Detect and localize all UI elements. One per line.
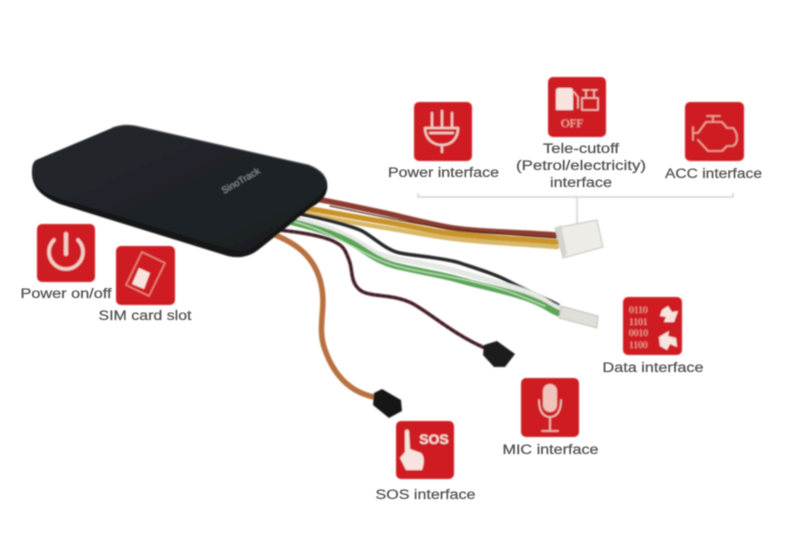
icon: power on/off: [37, 224, 95, 282]
connector: white six-pin plug: [555, 220, 603, 258]
label: data interface: Data interface: [602, 360, 704, 375]
device brand text: SinoTrack: [220, 166, 262, 197]
device: black GPS tracker: [32, 125, 327, 257]
label: power interface: Power interface: [388, 165, 499, 180]
icon: SIM card: [116, 246, 175, 305]
icon: data interface: [623, 297, 682, 355]
label: SOS interface: SOS interface: [376, 487, 476, 502]
label: MIC interface: MIC interface: [502, 442, 598, 457]
label: ACC interface: ACC interface: [665, 166, 762, 181]
icon: tele-cutoff: [548, 77, 606, 137]
icon: power interface: [414, 102, 472, 161]
icon: data interface: 1101: [629, 318, 648, 328]
wire: orange SOS lead: [267, 232, 374, 397]
icon: data interface: 1100: [629, 341, 648, 351]
connector: data plug: [559, 306, 598, 328]
label: power on/off: Power on/off: [20, 286, 112, 301]
icon: ACC engine: [685, 102, 744, 161]
label: tele-cutoff interface: interface: [550, 175, 612, 190]
connector: SOS plug: [373, 389, 402, 418]
icon: data interface: 0010: [629, 329, 648, 339]
label: SIM card slot: SIM card slot: [98, 308, 192, 323]
icon: SOS button: SOS: [419, 431, 449, 447]
icon: microphone: [521, 378, 579, 437]
label: tele-cutoff interface: Tele-cutoff: [543, 141, 619, 156]
icon: data interface: 0110: [629, 306, 648, 316]
wire bundle: data interface: [283, 214, 558, 313]
bracket linking top interfaces to connector: [418, 193, 733, 226]
connector: microphone plug: [483, 341, 515, 367]
wire bundle: power, tele-cutoff and ACC: [296, 197, 557, 247]
wire: twisted microphone lead: [278, 230, 487, 349]
icon: SOS button: [396, 421, 454, 479]
icon: tele-cutoff: OFF: [561, 116, 583, 130]
label: tele-cutoff interface: [516, 141, 646, 190]
label: tele-cutoff interface: (Petrol/electricity): [516, 158, 646, 173]
